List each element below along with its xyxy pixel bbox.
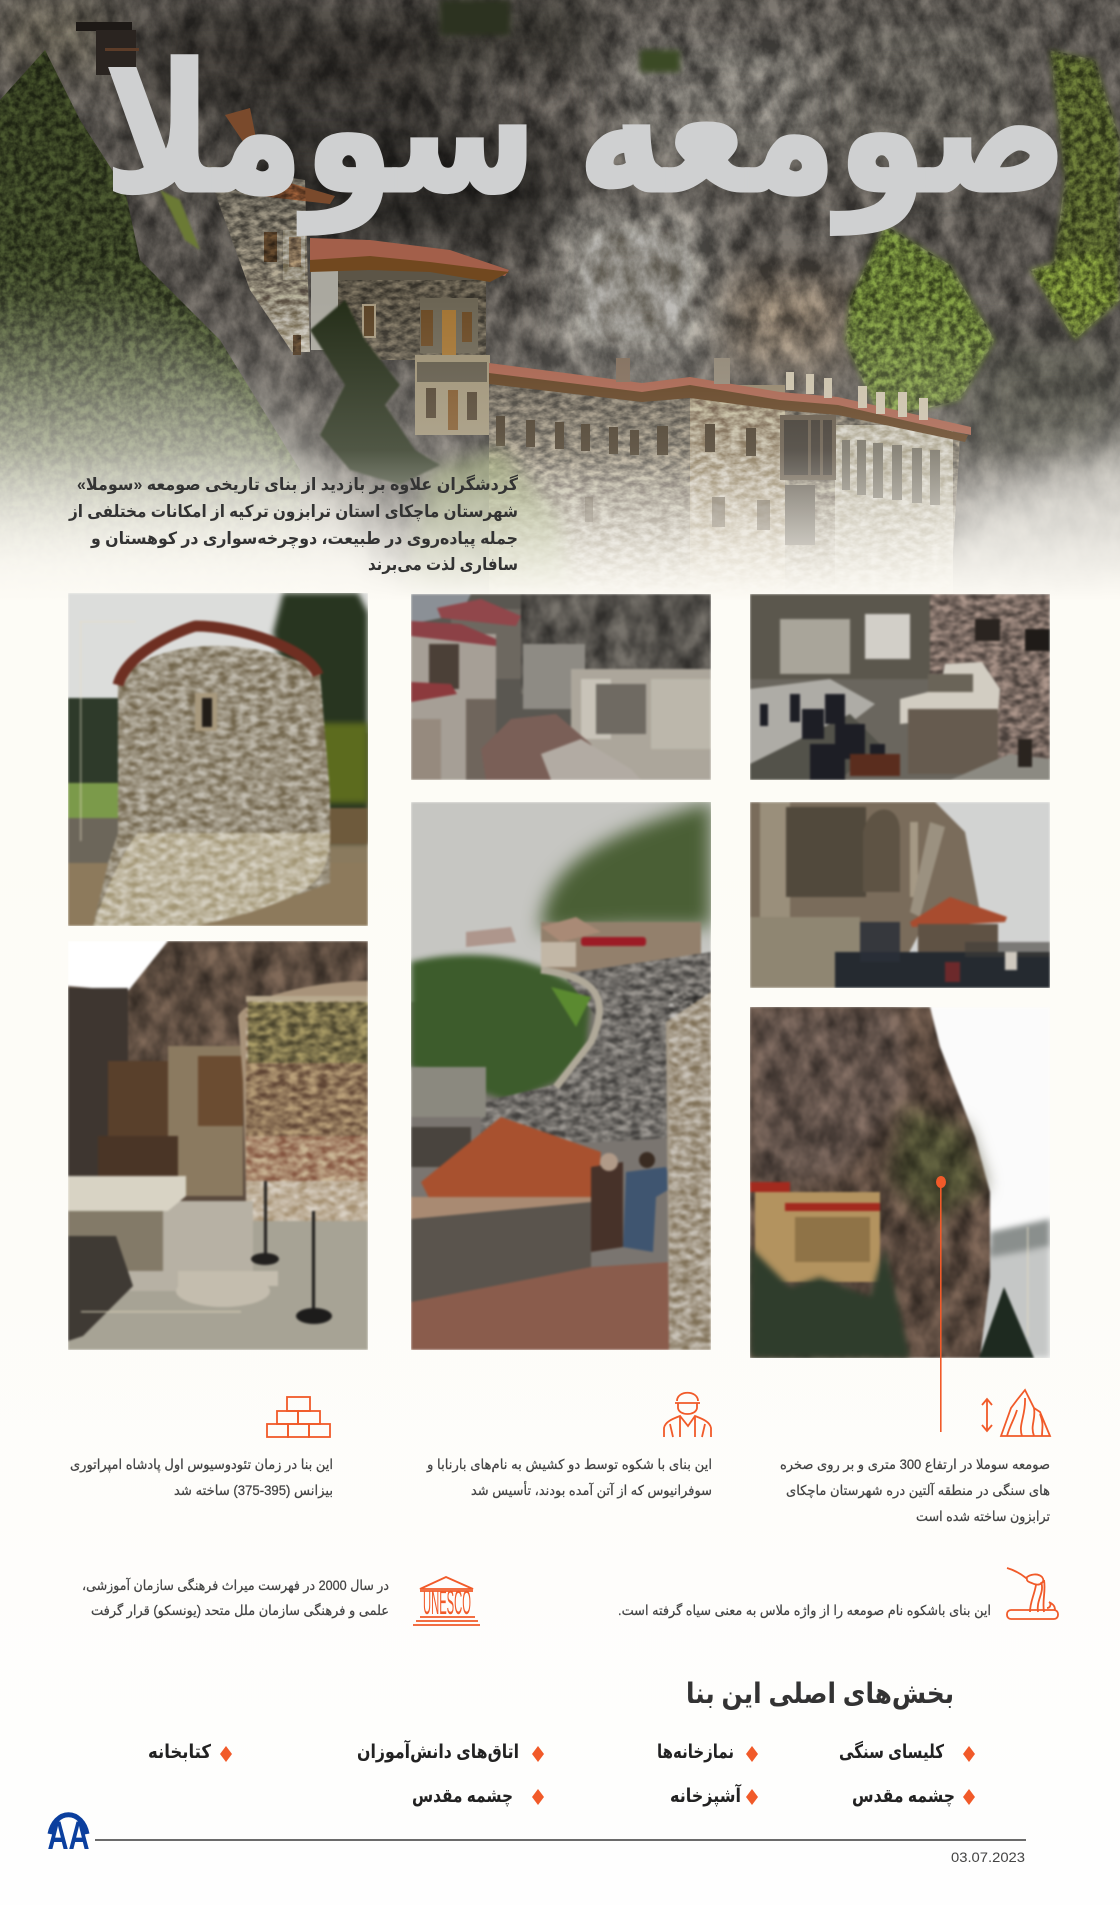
intro paragraph [68, 474, 518, 575]
small fir tree at building corner [310, 300, 440, 485]
text: founders: این بنای با شکوه توسط دو کشیش به نام‌های بارنابا و [426, 1457, 712, 1473]
text: construction era [70, 1457, 333, 1499]
icon: UNESCO temple [413, 1577, 480, 1625]
text: construction era: این بنا در زمان تئودوسیوس اول پادشاه امپراتوری [70, 1457, 333, 1473]
text: founders [426, 1457, 712, 1499]
intro paragraph: گردشگران علاوه بر بازدید از بنای تاریخی صومعه «سوملا» [77, 474, 518, 495]
fog-edge moss strip [160, 190, 200, 250]
text: height of monastery: های سنگی در منطقه آلتین دره شهرستان ماچکای [786, 1482, 1050, 1499]
icon: height and mountain [982, 1390, 1050, 1436]
left fir tree [0, 50, 300, 512]
photo: courtyard with visitors and frescoes [750, 594, 1050, 780]
list of main sections: نمازخانه‌ها [657, 1742, 734, 1763]
main building [489, 358, 971, 600]
text: UNESCO listing: علمی و فرهنگی سازمان ملل متحد (یونسکو) قرار گرفت [91, 1602, 389, 1619]
photo: arches and pavilion with crowd [750, 802, 1050, 988]
intro paragraph: سافاری لذت می‌برند [368, 555, 518, 575]
list of main sections: چشمه مقدس [852, 1786, 955, 1807]
text: name origin: این بنای باشکوه نام صومعه را از واژه ملاس به معنی سیاه گرفته است. [618, 1602, 991, 1619]
text: height of monastery [780, 1457, 1050, 1525]
cave opening [76, 22, 139, 75]
intro paragraph: جمله پیاده‌روی در طبیعت، دوچرخه‌سواری در کوهستان و [90, 529, 518, 549]
list of main sections: چشمه مقدس [412, 1786, 513, 1807]
list of main sections: کلیسای سنگی [839, 1740, 945, 1763]
list of main sections: آشپزخانه [670, 1783, 741, 1807]
list of main sections: اتاق‌های دانش‌آموزان [357, 1739, 519, 1763]
text: UNESCO [423, 1584, 471, 1622]
text: UNESCO listing: در سال 2000 در فهرست میراث فرهنگی سازمان آموزشی، [82, 1577, 389, 1594]
date: 03.07.2023 [951, 1849, 1025, 1865]
text: founders: سوفرانیوس که از آتن آمده بودند، تأسیس شد [471, 1481, 712, 1499]
text: height of monastery: ترابزون ساخته شده است [916, 1509, 1050, 1525]
fade to page [0, 300, 1120, 600]
connector line with dot [936, 1176, 946, 1432]
icon: stacked bricks [267, 1397, 330, 1437]
heading: main sections: بخش‌های اصلی این بنا [686, 1678, 954, 1710]
photo: monastery on cliff from afar [750, 1007, 1050, 1358]
photo: misty stairs with two visitors [411, 802, 711, 1350]
fog on right [900, 420, 1120, 640]
photo: fresco church [68, 941, 368, 1350]
text: UNESCO listing [82, 1577, 389, 1619]
photo: courtyard stairs and cells [411, 594, 711, 780]
bright green tree [400, 450, 570, 600]
icon: quill and scroll [1007, 1568, 1058, 1619]
mid building [310, 238, 509, 435]
tall left tower [205, 108, 335, 355]
photo: round stone tower [68, 593, 368, 926]
right green foliage [440, 0, 1120, 430]
list of main sections [148, 1739, 975, 1807]
AA logo: AA [48, 1814, 90, 1858]
list of main sections: کتابخانه [148, 1742, 212, 1763]
footer rule [95, 1839, 1026, 1841]
intro paragraph: شهرستان ماچکای استان ترابزون ترکیه از امکانات مختلفی از [68, 502, 518, 522]
hero photo: monastery on cliff [0, 0, 1120, 592]
text: construction era: بیزانس (395-375) ساخته شد [174, 1483, 333, 1499]
fog on left [0, 270, 420, 620]
icon: worker with helmet [664, 1393, 711, 1437]
text: height of monastery: صومعه سوملا در ارتفاع 300 متری و بر روی صخره [780, 1457, 1050, 1473]
